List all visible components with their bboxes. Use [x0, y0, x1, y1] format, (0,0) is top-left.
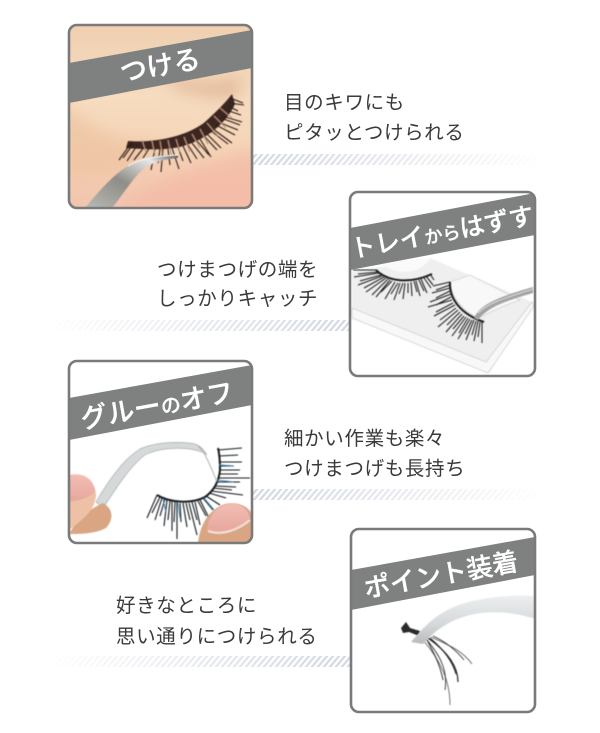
caption: 好きなところに: 思い通りにつけられる [116, 626, 318, 648]
decorative stripe bands [102, 154, 491, 667]
tweezers [85, 155, 178, 208]
banner label: つける [118, 44, 203, 88]
grey banner [350, 193, 535, 270]
caption: 細かい作業も楽々: 細かい作業も楽々 [284, 428, 445, 450]
caption: つけまつげの端を [157, 259, 318, 310]
right fingertip [198, 503, 252, 543]
left fingers [69, 474, 111, 534]
caption: つけまつげの端を: しっかりキャッチ [157, 288, 318, 310]
grey banner [69, 365, 252, 440]
banner label: グルーのオフ [78, 377, 236, 435]
caption: つけまつげの端を: つけまつげの端を [157, 259, 318, 281]
banner label: ポイント装着 [362, 546, 521, 604]
caption: 目のキワにも: ピタッとつけられる [284, 122, 465, 144]
point lash cluster [401, 622, 472, 705]
grey banner [351, 537, 535, 610]
tweezers [411, 596, 535, 644]
false lashes on eye [119, 94, 244, 172]
banner label: トレイからはずす [348, 202, 536, 264]
caption: 細かい作業も楽々 [284, 428, 465, 480]
eyelid photo background [69, 25, 252, 208]
caption: 細かい作業も楽々: つけまつげも長持ち [284, 458, 465, 480]
caption: 好きなところに [116, 595, 318, 648]
panel: トレイからはずす photo card [348, 192, 536, 376]
tweezers [96, 442, 217, 508]
panel: つける photo card [60, 25, 260, 215]
tweezers [474, 287, 533, 320]
panel: グルーのオフ photo card [69, 361, 252, 543]
panel: ポイント装着 photo card [351, 529, 535, 712]
lash being peeled [147, 448, 250, 539]
caption: 好きなところに: 好きなところに [116, 595, 257, 617]
lash pair on tray [353, 270, 484, 343]
clear lash tray [352, 258, 534, 373]
caption: 目のキワにも: 目のキワにも [284, 92, 405, 114]
caption: 目のキワにも [284, 92, 465, 144]
grey banner [69, 30, 252, 103]
